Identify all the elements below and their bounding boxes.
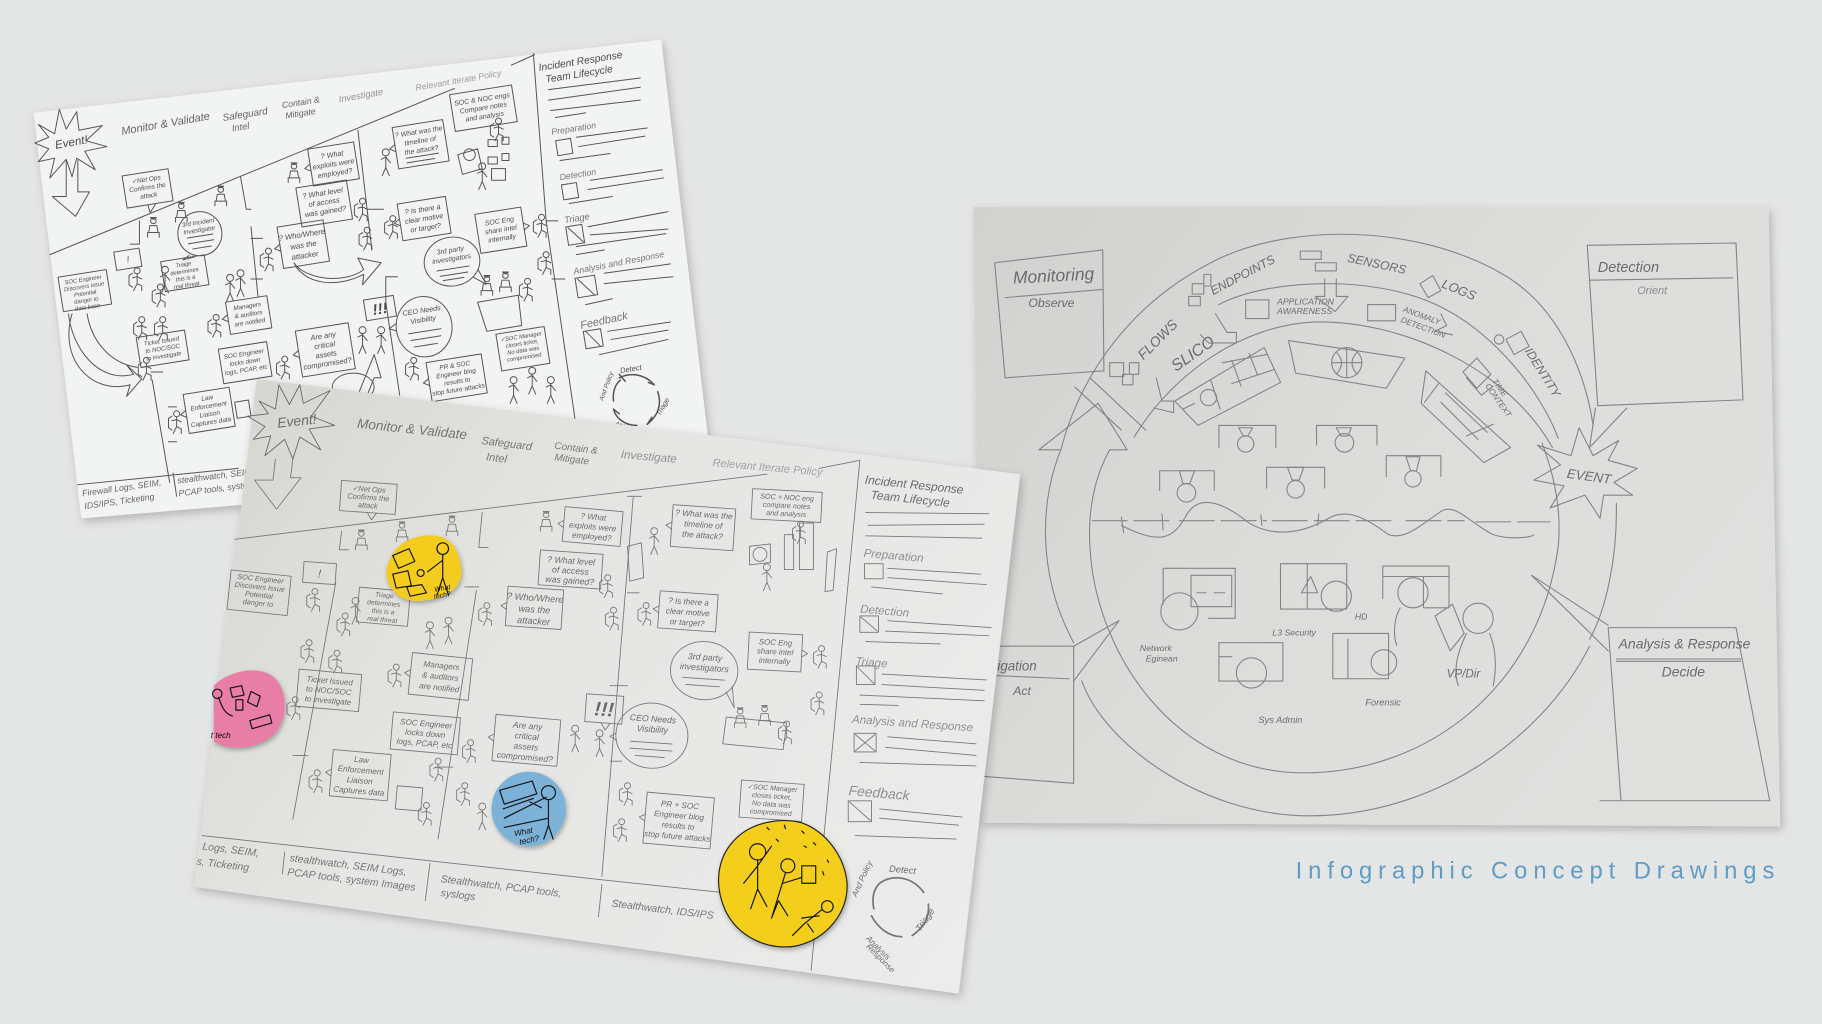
callout boxes: and analysis <box>766 508 807 519</box>
column headers: Intel <box>485 451 508 466</box>
concept sketch sheet: white swimlane <box>34 40 711 518</box>
callout boxes: or target? <box>669 617 705 629</box>
callout boxes: Discovers issue <box>64 281 106 293</box>
panel: detection orient <box>1587 243 1743 448</box>
callout boxes: Enforcement <box>337 764 385 777</box>
team role labels: Network <box>1140 643 1172 653</box>
callout boxes: 3rd Incident <box>181 217 215 229</box>
data source labels: AWARENESS <box>1276 306 1333 316</box>
wall monitors <box>1175 341 1511 463</box>
data source labels: SLICO <box>1168 332 1218 375</box>
team role labels: Eginean <box>1146 653 1178 663</box>
right panel: incident response team lifecycle: Team Lifecycle <box>870 488 951 510</box>
callout boxes: Enforcement <box>190 400 228 413</box>
data source labels: DETECTION <box>1400 315 1447 340</box>
callout boxes: ? What level <box>547 554 595 567</box>
callout boxes: investigators <box>680 661 730 674</box>
right panel: incident response team lifecycle <box>848 473 991 839</box>
callout boxes: Discovers issue <box>234 580 285 594</box>
callout boxes: ? Who/Where <box>507 591 564 605</box>
bottom tools row: Logs, SEIM, <box>202 842 260 859</box>
right panel: incident response team lifecycle: Analysis and Response <box>851 713 974 734</box>
bottom tools row: stealthwatch, SEIM Logs, <box>177 464 275 486</box>
callout boxes: stop future attacks <box>432 382 486 398</box>
team role labels: Sys Admin <box>1258 715 1302 725</box>
callout boxes: was the <box>290 239 317 252</box>
data source labels: SENSORS <box>1346 251 1407 277</box>
column headers: Contain & <box>281 94 321 110</box>
lifecycle cycle diagram: Triage <box>914 906 937 933</box>
callout boxes: Are any <box>310 330 336 342</box>
team role labels <box>1140 611 1481 725</box>
divider wave <box>1092 502 1550 538</box>
callout boxes: attack <box>358 500 379 511</box>
data source labels <box>1134 251 1564 420</box>
column headers: Safeguard <box>481 435 533 453</box>
callout boxes: the attack? <box>682 529 724 542</box>
right panel: incident response team lifecycle: Team Lifecycle <box>545 64 614 86</box>
team role labels: HD <box>1355 611 1367 621</box>
panel: mitigation act: Act <box>1012 684 1031 698</box>
bottom tools row <box>196 842 714 922</box>
paper: white swimlane sheet <box>34 40 711 518</box>
stick figures <box>129 118 555 434</box>
callout boxes: ? What level <box>302 185 343 201</box>
callout boxes: Liaison <box>199 409 221 420</box>
column headers: Relevant Iterate Policy <box>415 68 503 93</box>
lifecycle cycle diagram: And Policy <box>598 370 616 403</box>
callout boxes: ✓SOC Manager <box>500 331 542 344</box>
callout boxes: ? Who/Where <box>278 227 326 243</box>
column headers: Relevant Iterate Policy <box>712 457 824 479</box>
callout boxes: of access <box>552 564 590 577</box>
inner arc bands <box>1134 284 1558 448</box>
panel: monitoring observe <box>995 250 1146 430</box>
bottom tools row: PCAP tools, system Images <box>287 867 416 894</box>
callout boxes: compromised? <box>303 355 353 372</box>
sticker: pink what tech <box>211 670 285 748</box>
callout boxes: ? What <box>580 511 607 523</box>
callout boxes: Managers <box>233 301 262 312</box>
callout boxes: Captures data <box>190 416 232 429</box>
data source labels: TIME <box>1490 377 1509 399</box>
callout boxes: Triage <box>175 261 192 270</box>
panel: analysis and response decide: Analysis & Response <box>1618 636 1751 652</box>
callout boxes: SOC Engineer <box>64 275 102 286</box>
lifecycle cycle diagram: Triage <box>656 397 671 417</box>
right panel: incident response team lifecycle: Preparation <box>551 120 597 137</box>
drawing: OODA loop <box>980 234 1770 816</box>
lifecycle cycle diagram <box>598 363 671 434</box>
callout boxes: ✓Net Ops <box>131 174 161 186</box>
callout boxes: SOC Eng <box>759 637 792 648</box>
right panel: incident response team lifecycle <box>538 50 673 355</box>
callout boxes: Visibility <box>636 723 669 735</box>
panel: analysis and response decide <box>1532 575 1770 801</box>
panel: monitoring observe: Observe <box>1028 296 1075 310</box>
callout boxes: stop future attacks <box>644 829 711 844</box>
callout boxes: assets <box>315 348 338 360</box>
callout boxes: are notified <box>234 317 266 329</box>
paper: OODA sheet <box>974 207 1780 826</box>
callout boxes: Law <box>201 394 214 403</box>
event burst and arrow <box>248 385 335 509</box>
callout boxes: No data was <box>752 800 791 810</box>
callout boxes: Compare notes <box>459 101 508 116</box>
callout boxes: critical <box>514 730 540 742</box>
bottom tools row: Stealthwatch, PCAP tools, <box>440 874 562 900</box>
callout boxes: are notified <box>419 681 460 694</box>
icons: data sources <box>1110 251 1529 413</box>
bottom tools row: IDS/IPS, Ticketing <box>84 491 155 511</box>
callout boxes: or target? <box>410 221 441 234</box>
callout boxes: internally <box>488 233 517 245</box>
callout boxes: closes ticket, <box>505 339 539 350</box>
sticker: blue what tech: tech? <box>519 834 540 847</box>
callout boxes: the attack? <box>404 145 439 157</box>
bottom tools row: stealthwatch, SEIM Logs, <box>289 853 407 879</box>
panel: mitigation act: Mitigation <box>980 659 1037 674</box>
callout boxes: ! <box>126 255 130 265</box>
column headers <box>120 68 503 138</box>
bottom tools row: PCAP tools, system Images <box>178 475 287 498</box>
team at workstations <box>1161 564 1495 688</box>
callout boxes: Captures data <box>333 785 385 798</box>
sticker: yellow what tech <box>387 535 461 601</box>
callout boxes: Triage <box>375 592 394 600</box>
bottom tools row: Stealthwatch, IDS/IPS <box>611 899 714 922</box>
callout boxes: ? What was the <box>675 507 733 521</box>
callout boxes: share intel <box>484 224 518 236</box>
callout boxes: SOC Engineer <box>223 348 264 361</box>
callout boxes: compare notes <box>763 500 811 511</box>
callout boxes: ✓SOC Manager <box>747 784 798 794</box>
column headers: Monitor & Validate <box>356 416 468 442</box>
sticker: pink what tech: t tech <box>211 731 231 740</box>
callout boxes: Confirms the <box>347 491 390 503</box>
data source labels: FLOWS <box>1134 316 1181 362</box>
bottom tools row: syslogs <box>440 888 476 903</box>
callout boxes: Visibility <box>410 313 437 326</box>
column headers: Intel <box>231 121 251 133</box>
callout boxes: Are any <box>512 719 543 732</box>
callout boxes: 3rd party <box>688 651 723 663</box>
callout boxes: locks down <box>405 728 446 740</box>
right panel: incident response team lifecycle: Analysis and Response <box>572 249 665 277</box>
right panel: incident response team lifecycle: Feedback <box>848 782 911 803</box>
callout boxes: clear motive <box>404 211 444 226</box>
callout boxes: logs, PCAP, etc <box>396 737 453 751</box>
lifecycle cycle diagram <box>850 859 937 975</box>
callout boxes: this is a <box>176 274 197 284</box>
sticker: blue what tech <box>492 772 566 847</box>
callout boxes: real threat <box>173 281 201 291</box>
callout boxes: of access <box>308 195 340 209</box>
lifecycle cycle diagram: Response <box>864 942 897 975</box>
paper: tracing sheet <box>194 379 1020 994</box>
panel: detection orient: Orient <box>1637 285 1668 297</box>
callout boxes: !!! <box>371 300 389 319</box>
event burst: EVENT <box>1566 466 1613 487</box>
sticker: blue what tech: What <box>513 825 534 838</box>
callout boxes: was gained? <box>304 204 348 219</box>
callout boxes: was the <box>518 603 551 616</box>
right panel: incident response team lifecycle: Detection <box>860 603 910 620</box>
callout boxes: locks down <box>229 356 261 368</box>
bottom tools row <box>81 464 287 511</box>
lifecycle cycle diagram: Detect <box>889 864 917 876</box>
callout boxes: SOC Engineer <box>237 572 284 586</box>
callout boxes: to investigate <box>304 694 352 707</box>
callout boxes: timeline of <box>684 518 724 531</box>
callout boxes: danger to <box>242 597 274 609</box>
callout boxes: results to <box>661 820 695 832</box>
right panel: incident response team lifecycle: Triage <box>855 655 889 671</box>
callout boxes: & auditors <box>234 309 263 320</box>
column headers: Contain & <box>554 441 599 457</box>
callout boxes: Law <box>354 755 369 765</box>
callout boxes: SOC Eng <box>484 216 515 228</box>
callout boxes: SOC + NOC eng <box>760 491 814 503</box>
callout boxes: Potential <box>74 289 98 299</box>
callout boxes: Ticket Issued <box>306 674 353 687</box>
callout boxes: compromised <box>507 352 543 364</box>
callout boxes: to investigate <box>146 351 183 363</box>
data source labels: ENDPOINTS <box>1208 252 1277 298</box>
column headers: Investigate <box>620 448 678 466</box>
sticker: yellow what tech: tech? <box>433 591 452 601</box>
outer loop arrow <box>1039 234 1616 816</box>
callout boxes: ! <box>317 568 322 581</box>
panel: detection orient: Detection <box>1598 260 1659 276</box>
callout boxes: Confirms the <box>129 182 167 194</box>
sticker: yellow celebration <box>719 821 847 947</box>
right panel: incident response team lifecycle: Incident Response <box>864 473 964 497</box>
stick figures <box>287 511 837 841</box>
right panel: incident response team lifecycle: Feedback <box>579 310 629 332</box>
column headers: Investigate <box>338 87 384 104</box>
callout boxes: to NOC/SOC <box>306 684 352 697</box>
callout boxes: !!! <box>594 698 615 722</box>
callout boxes: Liaison <box>347 775 373 786</box>
callout boxes: PR & SOC <box>439 360 471 372</box>
callout boxes: Engineer blog <box>654 809 705 822</box>
callout boxes: critical <box>314 339 336 351</box>
column headers: Safeguard <box>222 106 269 124</box>
callout boxes: SOC & NOC engs <box>454 92 510 108</box>
callout boxes: clear motive <box>666 606 710 618</box>
lifecycle cycle diagram: Analysis <box>613 420 640 434</box>
callout boxes: to NOC/SOC <box>145 344 181 355</box>
callout boxes: CEO Needs <box>630 712 677 725</box>
right panel: incident response team lifecycle: Preparation <box>863 547 924 565</box>
callout boxes: ? Is there a <box>668 596 709 608</box>
panel: analysis and response decide: Decide <box>1662 663 1705 679</box>
right panel: incident response team lifecycle: Triage <box>563 211 590 225</box>
column headers: Mitigate <box>554 452 590 468</box>
data source labels: IDENTITY <box>1522 345 1564 400</box>
lifecycle cycle diagram: And Policy <box>850 859 875 899</box>
event burst <box>1534 428 1637 518</box>
callout boxes: Engineer blog <box>436 367 477 381</box>
callout boxes: timeline of <box>404 135 438 148</box>
concept sketch sheet: annotated tracing paper swimlane <box>194 379 1020 994</box>
callout boxes: ? What was the <box>395 125 443 140</box>
sticker: yellow what tech: What <box>434 584 452 594</box>
callout boxes: employed? <box>317 166 353 180</box>
drawing: white swimlane <box>35 50 673 511</box>
event burst and arrow: Event! <box>54 133 89 152</box>
drawing: tracing swimlane <box>196 385 991 975</box>
data source labels: LOGS <box>1440 276 1479 303</box>
callout boxes: Managers <box>423 659 460 672</box>
data source labels: APPLICATION <box>1276 297 1335 307</box>
callout boxes: Ticket Issued <box>144 336 180 348</box>
callout boxes: closes ticket, <box>752 792 792 802</box>
callout boxes: attack <box>140 191 159 201</box>
callout boxes: employed? <box>572 531 612 543</box>
panel: mitigation act <box>980 621 1119 783</box>
concept sketch sheet: OODA loop room <box>974 207 1780 826</box>
callout boxes: CEO Needs <box>402 303 441 318</box>
callout boxes: this is a <box>371 608 395 617</box>
callout boxes: exploits were <box>312 156 355 172</box>
callout boxes: internally <box>759 656 792 667</box>
column headers <box>356 416 824 479</box>
callout boxes <box>227 480 822 849</box>
callout boxes: determines <box>367 599 401 609</box>
callout boxes: ? What <box>320 148 344 161</box>
team role labels: Forensic <box>1365 697 1401 707</box>
callout boxes: assets <box>513 741 539 753</box>
swimlane dividers <box>50 54 587 500</box>
callout boxes: investigators <box>432 253 472 266</box>
event burst and arrow: Event! <box>276 411 317 431</box>
data source labels: ANOMALY <box>1401 305 1442 327</box>
callout boxes: No data was <box>507 346 540 357</box>
large flow arrows <box>69 258 381 407</box>
callout boxes: results to <box>444 376 471 388</box>
lifecycle cycle diagram: Detect <box>619 363 643 375</box>
callout boxes <box>58 85 550 434</box>
callout boxes: SOC Engineer <box>400 717 453 731</box>
callout boxes: data base <box>75 303 101 313</box>
callout boxes: compromised <box>750 808 793 818</box>
analysts at desks <box>1160 425 1441 502</box>
callout boxes: attacker <box>291 249 320 262</box>
callout boxes: danger to <box>74 296 100 306</box>
callout boxes: share intel <box>757 646 794 657</box>
panel: monitoring observe: Monitoring <box>1012 263 1095 288</box>
right panel: incident response team lifecycle: Detection <box>559 167 597 182</box>
callout boxes: Investigator <box>183 224 217 236</box>
bottom tools row: Firewall Logs, SEIM, <box>81 477 162 498</box>
callout boxes: 3rd party <box>436 245 464 257</box>
callout boxes: exploits were <box>569 520 617 534</box>
data source labels: CONTEXT <box>1483 382 1514 420</box>
event burst and arrow <box>35 109 107 216</box>
callout boxes: and analysis <box>465 110 505 124</box>
callout boxes: compromised? <box>496 750 554 764</box>
callout boxes: Potential <box>245 589 274 601</box>
callout boxes: PR + SOC <box>661 799 699 811</box>
team role labels: VP/Dir <box>1447 668 1481 681</box>
team role labels: L3 Security <box>1272 628 1317 638</box>
swimlane dividers <box>202 460 860 970</box>
callout boxes: ? Is there a <box>404 202 441 217</box>
column headers: Mitigate <box>285 106 316 121</box>
callout boxes: was gained? <box>545 574 595 587</box>
lifecycle cycle diagram: Analysis <box>864 933 892 962</box>
callout boxes: real threat <box>367 615 399 625</box>
callout boxes: attacker <box>517 615 551 627</box>
callout boxes: logs, PCAP, etc <box>225 363 269 377</box>
callout boxes: ✓Net Ops <box>352 484 386 495</box>
caption: Infographic Concept Drawings <box>1296 858 1774 885</box>
callout boxes: & auditors <box>422 670 459 683</box>
bottom tools row: s, Ticketing <box>196 857 250 874</box>
right panel: incident response team lifecycle: Incident Response <box>538 50 624 74</box>
column headers: Monitor & Validate <box>120 111 211 138</box>
callout boxes: determines <box>170 267 199 277</box>
